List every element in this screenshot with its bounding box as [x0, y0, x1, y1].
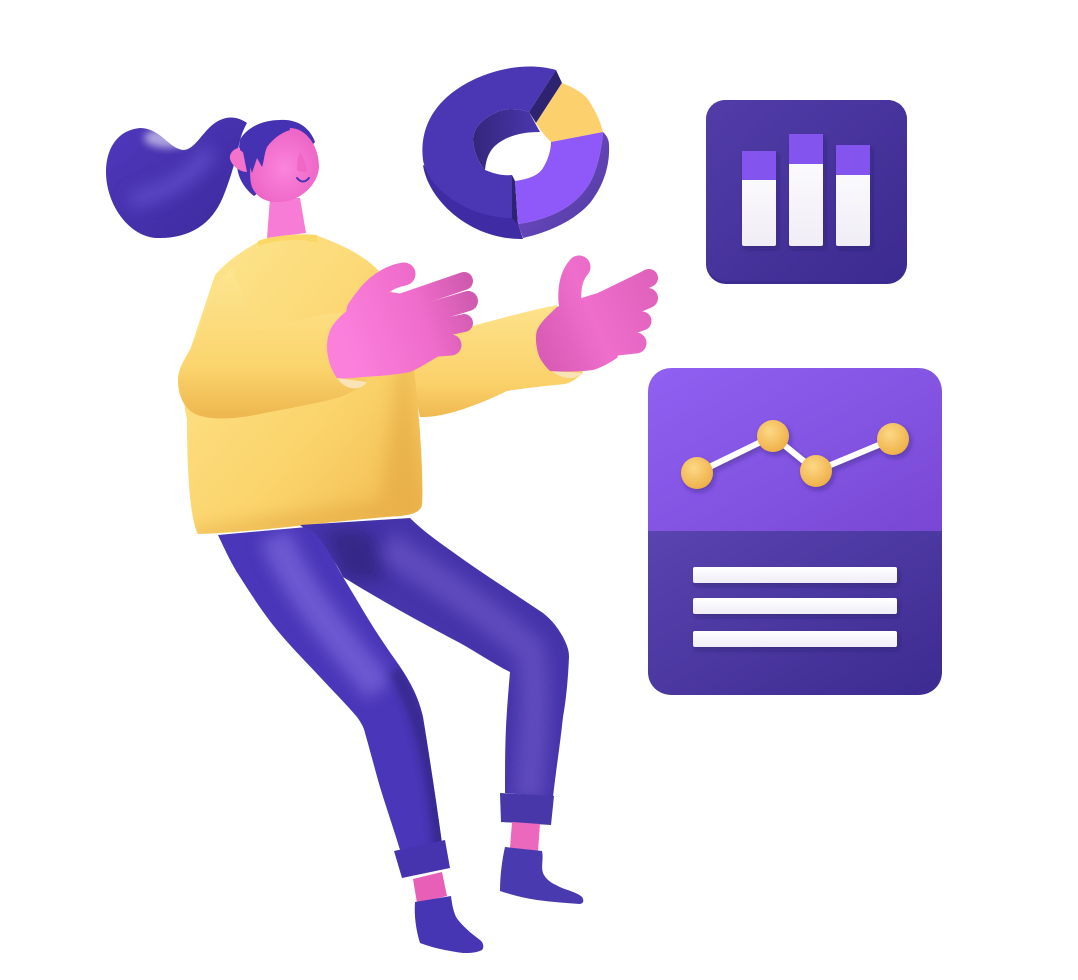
bar 1 — [742, 151, 776, 246]
line chart — [681, 420, 909, 489]
palm — [327, 292, 445, 378]
far arm sleeve — [405, 305, 583, 417]
head — [230, 120, 319, 202]
ponytail — [106, 118, 247, 238]
ear — [230, 147, 247, 172]
card background — [706, 100, 907, 284]
ankles — [413, 822, 540, 903]
bar 2 — [789, 134, 823, 246]
pants — [218, 518, 569, 878]
neck — [267, 198, 306, 238]
illustration: woman presenting data charts — [106, 66, 942, 953]
bar 3 — [836, 145, 870, 246]
fingers — [600, 278, 649, 346]
donut: divider — [529, 70, 562, 123]
nose — [297, 152, 307, 172]
palm — [536, 288, 624, 372]
thumb — [570, 267, 579, 302]
near cuff — [394, 840, 450, 878]
text lines — [693, 567, 897, 647]
near ankle — [413, 872, 447, 903]
donut: blue depth — [423, 165, 523, 239]
thumb — [358, 274, 404, 310]
face — [250, 128, 319, 202]
bar chart card — [706, 100, 907, 284]
donut: divider lower — [512, 175, 518, 225]
donut: blue segment — [422, 66, 556, 218]
far cuff — [500, 793, 554, 825]
card lower panel — [648, 530, 942, 695]
donut: yellow segment — [536, 83, 603, 142]
far ankle — [510, 822, 540, 851]
donut chart — [422, 66, 609, 239]
near shoe — [415, 896, 483, 953]
line chart card — [648, 368, 942, 695]
near hand — [327, 274, 468, 378]
far hand — [536, 267, 649, 372]
smile — [297, 178, 309, 182]
sleeve opening — [552, 371, 583, 378]
donut: purple segment — [515, 132, 603, 224]
near leg — [218, 527, 442, 850]
sleeve opening — [337, 378, 367, 388]
far leg — [300, 518, 569, 797]
fingers — [400, 281, 468, 347]
collar — [258, 234, 318, 246]
near arm sleeve — [178, 268, 367, 418]
card upper panel — [648, 368, 942, 531]
sweater body — [180, 234, 425, 540]
donut: hole wall — [473, 109, 540, 170]
donut: purple depth — [518, 132, 609, 238]
far shoe — [500, 847, 583, 904]
fringe — [240, 121, 290, 173]
hair back — [237, 120, 315, 196]
